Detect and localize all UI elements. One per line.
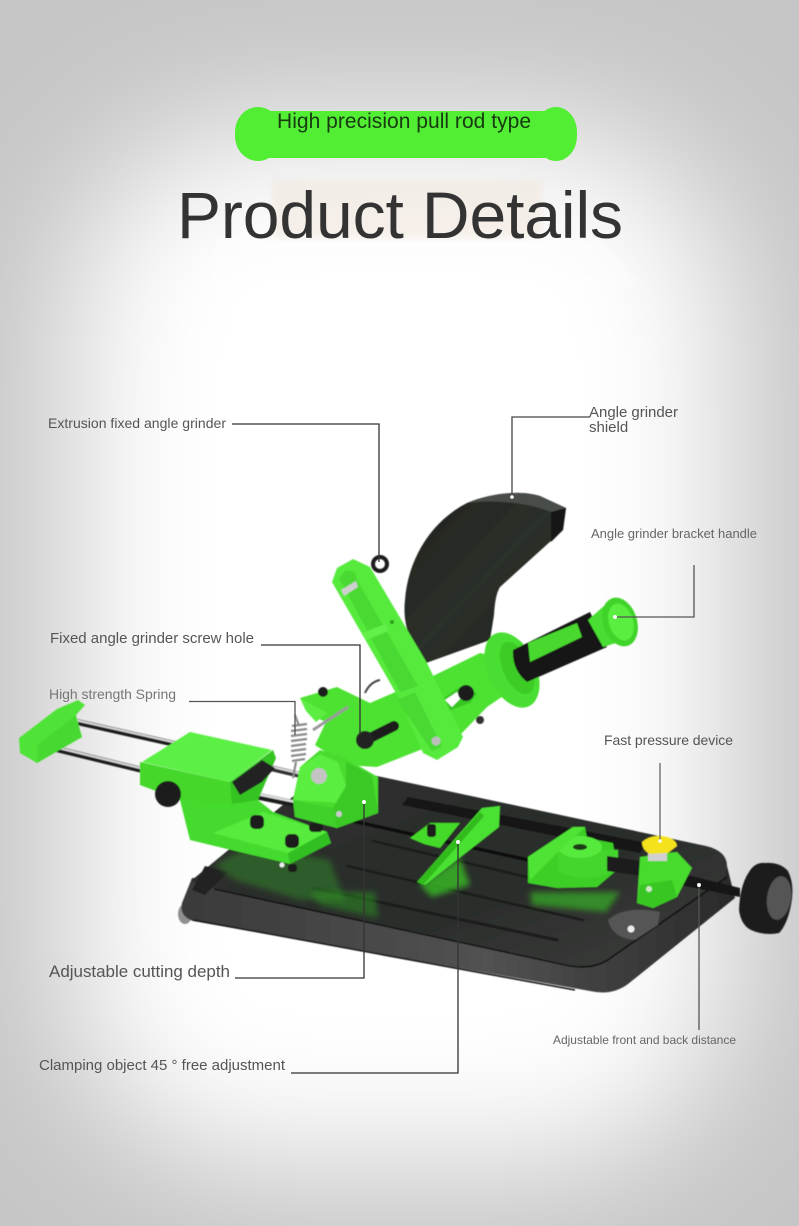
pivot block: [293, 750, 378, 828]
label: extrusion fixed angle grinder: [48, 415, 379, 562]
machine illustration: [19, 493, 794, 992]
label: angle grinder bracket handle: Angle grinder bracket handle: [591, 526, 757, 541]
label: adjustable cutting depth: Adjustable cutting depth: [49, 962, 230, 981]
label: high strength spring: [49, 686, 295, 735]
tag pill: high precision pull rod type: [235, 107, 577, 161]
label: angle grinder shield: [510, 404, 678, 499]
foot: [180, 800, 331, 864]
base plate: [178, 766, 735, 992]
spring: [291, 715, 307, 778]
plate reflections: [215, 845, 345, 900]
horizontal body: [300, 653, 512, 767]
label: clamping object 45 degree free adjustment: Clamping object 45 ° free adjustment: [39, 1057, 286, 1074]
block openings: [232, 760, 275, 795]
tag pill: high precision pull rod type: High precision pull rod type: [277, 110, 531, 133]
swing arm: [300, 557, 512, 767]
title: Product Details: [177, 178, 623, 252]
label: extrusion fixed angle grinder: Extrusion fixed angle grinder: [48, 415, 226, 431]
pivot screws and wire: [373, 557, 387, 571]
label: adjustable front and back distance: [553, 883, 736, 1047]
foot stud beneath plate: [288, 864, 297, 872]
plate notch and hole: [608, 910, 660, 940]
knob: [739, 863, 794, 934]
label: clamping object 45 degree free adjustment: [39, 840, 460, 1074]
label: adjustable cutting depth: [49, 800, 366, 981]
label: angle grinder shield: Angle grinder: [589, 404, 678, 421]
long slot: [402, 797, 647, 853]
label: adjustable front and back distance: Adjustable front and back distance: [553, 1033, 736, 1047]
pressure screw and yellow quick release: [607, 836, 740, 908]
label: angle grinder shield: shield: [589, 419, 628, 436]
label: angle grinder bracket handle: [591, 526, 757, 619]
rod end bracket: [19, 700, 85, 763]
sliding block and foot: [140, 732, 331, 872]
label: fixed angle grinder screw hole: Fixed angle grinder screw hole: [50, 630, 254, 647]
shield: [404, 493, 566, 663]
angle clamp fence: [410, 806, 500, 885]
label: fixed angle grinder screw hole: [50, 630, 360, 735]
handle: [473, 593, 644, 716]
block top: [142, 732, 272, 782]
slot: [437, 687, 477, 713]
label: high strength spring: High strength Spring: [49, 686, 176, 702]
sliding clamp jaw: [528, 827, 618, 888]
label: fast pressure device: [604, 732, 733, 843]
label: fast pressure device: Fast pressure device: [604, 732, 733, 748]
vertical bar: [332, 559, 463, 760]
guide rods: [40, 720, 300, 804]
block front: [140, 762, 240, 804]
